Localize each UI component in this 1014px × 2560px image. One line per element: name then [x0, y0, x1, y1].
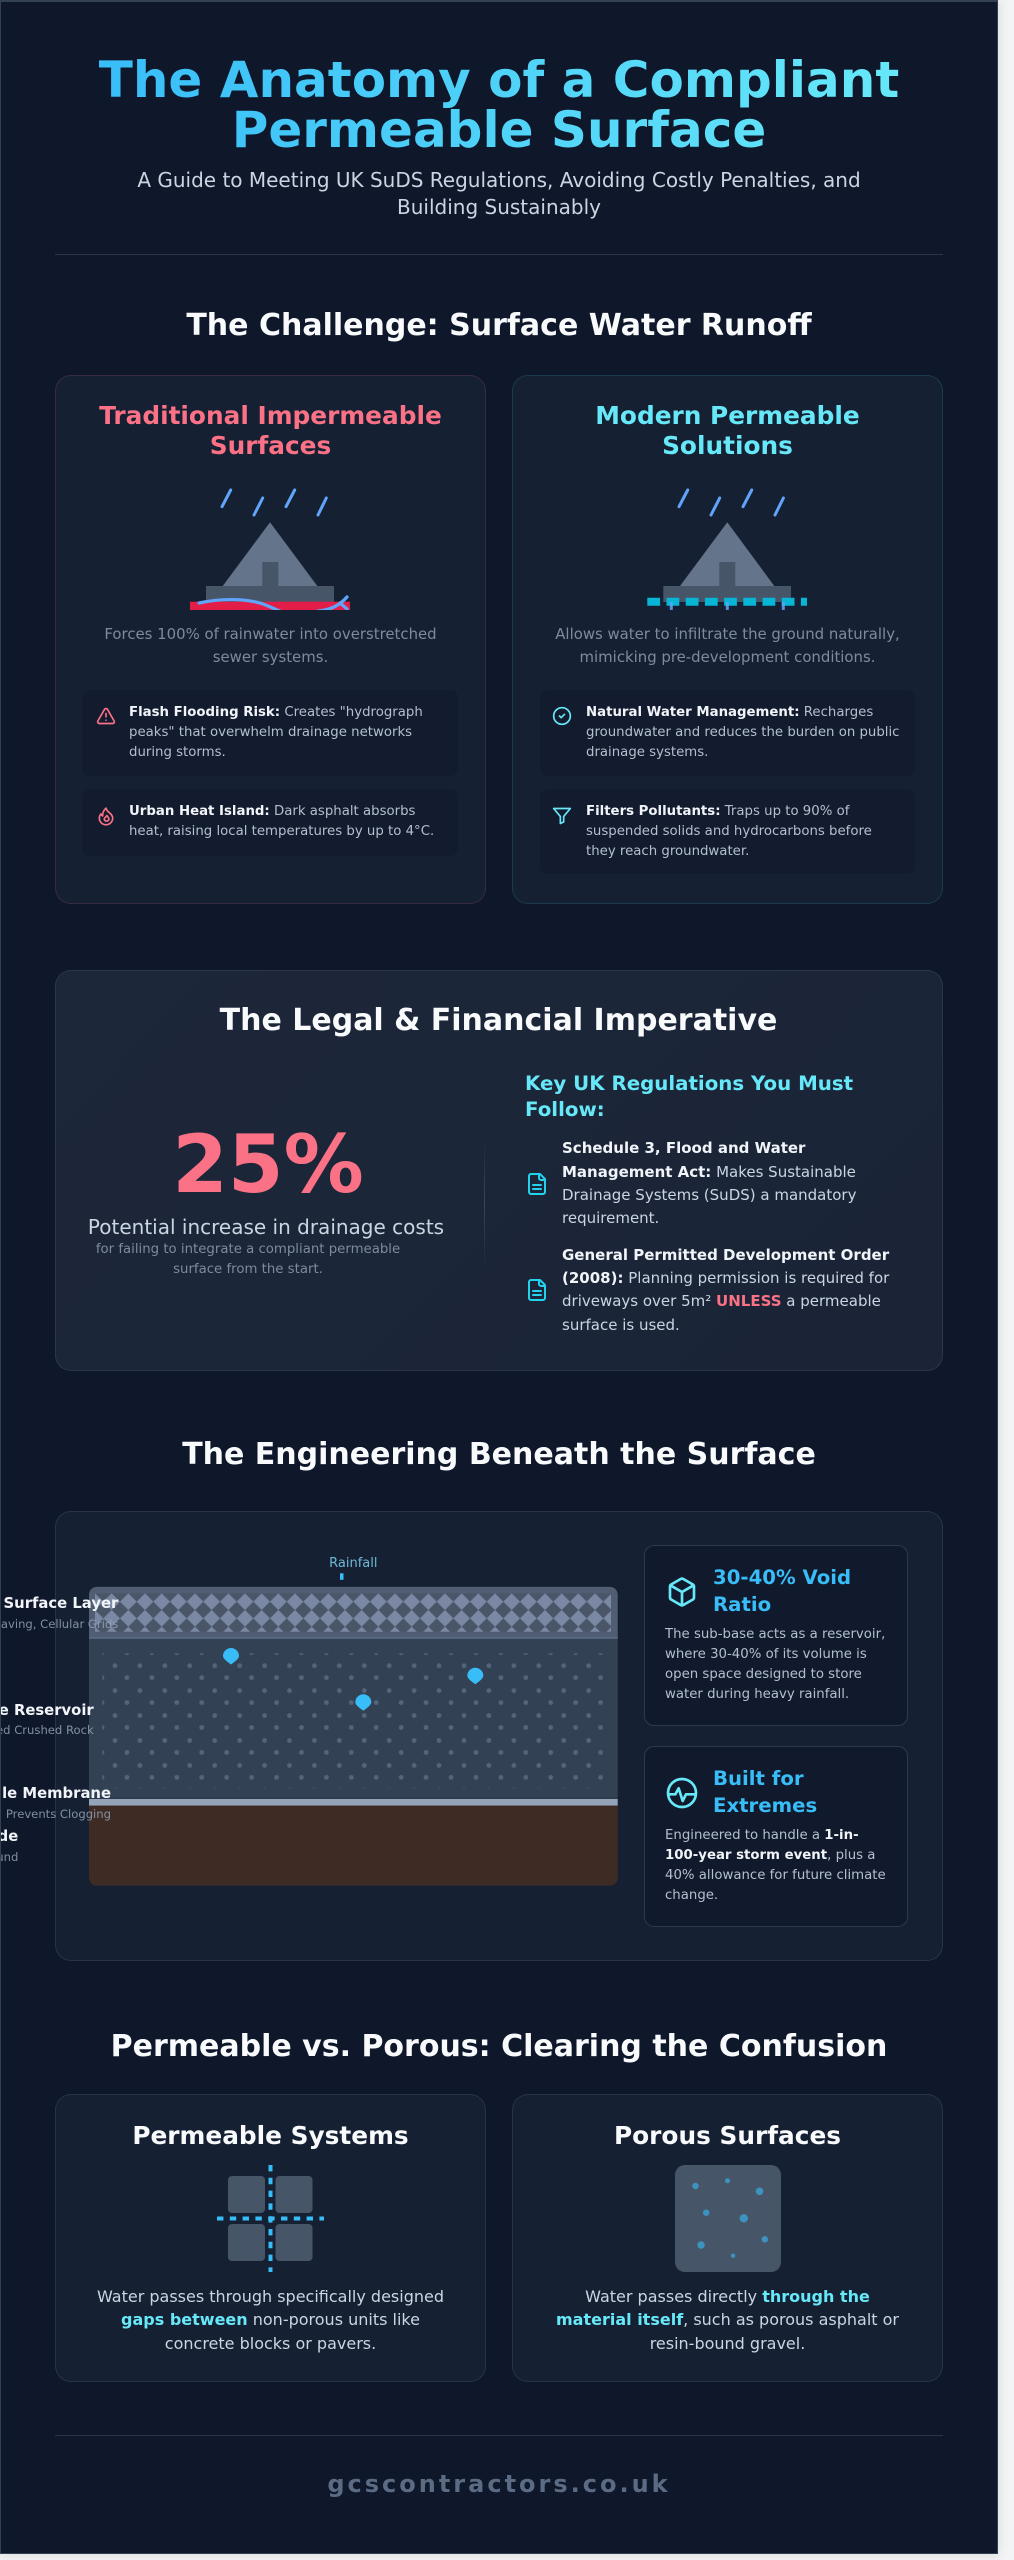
- text: filters pollutants: they reach groundwater.: [586, 844, 749, 859]
- feature heading: void ratio: Ratio: [713, 1593, 771, 1616]
- icon: document 1: [528, 1173, 546, 1195]
- feature heading: void ratio: 30-40% Void: [713, 1566, 851, 1589]
- layer: subgrade: [89, 1806, 618, 1886]
- panel heading: porous surfaces: Porous Surfaces: [614, 2121, 841, 2150]
- icon: document 2: [528, 1279, 546, 1301]
- text: porous surfaces: Water passes directly through the: [585, 2287, 870, 2306]
- illustration: house on permeable surface: [647, 488, 807, 610]
- text: flash flooding: during storms.: [129, 745, 226, 760]
- layer: surface: [89, 1587, 618, 1639]
- panel heading: permeable systems: Permeable Systems: [132, 2121, 409, 2150]
- feature heading: extremes: [713, 1767, 817, 1817]
- title: Permeable Surface: [232, 101, 766, 159]
- text: flash flooding: [129, 705, 423, 760]
- text: permeable systems: [97, 2287, 444, 2353]
- layer: reservoir: [89, 1639, 618, 1799]
- text: urban heat island: [129, 804, 434, 839]
- panel heading: modern: Solutions: [662, 431, 793, 460]
- heading: key regulations: Follow:: [525, 1098, 605, 1121]
- subtitle: Building Sustainably: [397, 195, 601, 219]
- text: natural water management: Natural Water Management: Recharges: [586, 705, 873, 720]
- heading: the engineering: The Engineering Beneath the Surface: [182, 1437, 816, 1472]
- water drops: [223, 1648, 483, 1711]
- text: natural water management: [586, 705, 900, 760]
- label: rainfall: Rainfall: [329, 1556, 377, 1571]
- icon: porous block: [675, 2165, 781, 2272]
- regulation: schedule 3: requirement.: [562, 1209, 659, 1227]
- feature text: void ratio: where 30-40% of its volume is: [665, 1647, 867, 1662]
- chart: permeable paving cross section: [89, 1556, 618, 1886]
- panel: engineering cross section: [55, 1511, 943, 1961]
- icon: pavers with gaps: [217, 2165, 324, 2272]
- panel: permeable systems: [55, 2094, 486, 2382]
- panel heading: traditional: [99, 401, 442, 460]
- regulation: permitted development order: driveways over 5m² UNLESS a permeable: [562, 1292, 881, 1310]
- description: traditional: Forces 100% of rainwater into overstretched: [104, 625, 437, 643]
- callout: flash flooding: [82, 690, 458, 776]
- regulation: schedule 3: Drainage Systems (SuDS) a mandatory: [562, 1186, 856, 1204]
- heading: the challenge: The Challenge: Surface Water Runoff: [186, 308, 812, 343]
- feature text: void ratio: [664, 1627, 885, 1702]
- footer: website: gcscontractors.co.uk: [327, 2470, 671, 2498]
- panel: legal and financial imperative: [55, 970, 943, 1371]
- text: flash flooding: peaks" that overwhelm drainage networks: [129, 725, 412, 740]
- regulation: permitted development order: General Permitted Development Order: [562, 1246, 889, 1264]
- feature heading: extremes: Built for: [713, 1767, 804, 1790]
- statistic: 25%: 25%: [172, 1118, 364, 1211]
- panel heading: traditional: Traditional Impermeable: [99, 401, 442, 430]
- statistic note: [96, 1242, 400, 1277]
- heading: key regulations: Key UK Regulations You Must: [525, 1072, 853, 1095]
- icon: flame: [98, 807, 114, 826]
- heading: permeable vs porous: Permeable vs. Porous: Clearing the Confusion: [111, 2029, 887, 2064]
- panel heading: modern: Modern Permeable: [595, 401, 860, 430]
- statistic note: surface from the start.: [173, 1262, 323, 1277]
- text: filters pollutants: [586, 804, 872, 859]
- description: traditional: sewer systems.: [213, 648, 328, 666]
- panel: porous surfaces: [512, 2094, 943, 2382]
- feature heading: extremes: Extremes: [713, 1794, 817, 1817]
- regulation: schedule 3: Management Act: Makes Sustainable: [562, 1163, 856, 1181]
- heading: legal: The Legal & Financial Imperative: [220, 1003, 777, 1038]
- callout: natural water management: [540, 690, 915, 776]
- text: filters pollutants: suspended solids and hydrocarbons before: [586, 824, 872, 839]
- feature: built for extremes: [644, 1746, 908, 1927]
- callout: urban heat island: [82, 789, 458, 856]
- feature text: extremes: 100-year storm event, plus a: [665, 1848, 875, 1863]
- feature text: void ratio: The sub-base acts as a reservoir,: [665, 1627, 885, 1642]
- feature text: extremes: change.: [665, 1888, 718, 1903]
- statistic label: Potential increase in drainage costs: [88, 1215, 444, 1239]
- regulation: permitted development order: surface is used.: [562, 1316, 680, 1334]
- panel: modern permeable solutions: [512, 375, 943, 904]
- description: modern: mimicking pre-development conditions.: [580, 648, 875, 666]
- text: urban heat island: Urban Heat Island: Dark asphalt absorbs: [129, 804, 415, 819]
- text: permeable systems: gaps between non-porous units like: [121, 2310, 420, 2329]
- text: natural water management: drainage systems.: [586, 745, 708, 760]
- icon: filter: [552, 808, 572, 824]
- feature text: void ratio: open space designed to store: [665, 1667, 862, 1682]
- feature: void ratio: [644, 1545, 908, 1726]
- text: porous surfaces: material itself, such as porous asphalt or: [556, 2310, 899, 2329]
- illustration: house on impermeable surface: [190, 488, 350, 610]
- callout: filters pollutants: [540, 789, 915, 874]
- description: modern: Allows water to infiltrate the ground naturally,: [555, 625, 900, 643]
- panel heading: modern: [595, 401, 860, 460]
- title: The Anatomy of a Compliant: [99, 51, 899, 109]
- feature text: extremes: Engineered to handle a 1-in-: [665, 1828, 859, 1843]
- text: permeable systems: concrete blocks or pavers.: [165, 2334, 376, 2353]
- layer: membrane: [89, 1799, 618, 1806]
- feature text: void ratio: water during heavy rainfall.: [665, 1687, 849, 1702]
- regulation: schedule 3: Schedule 3, Flood and Water: [562, 1139, 805, 1157]
- text: natural water management: groundwater and reduces the burden on public: [586, 725, 900, 740]
- regulation: permitted development order: [562, 1246, 890, 1334]
- subtitle: A Guide to Meeting UK SuDS Regulations, Avoiding Costly Penalties, and: [137, 168, 861, 192]
- text: urban heat island: heat, raising local temperatures by up to 4°C.: [129, 824, 434, 839]
- panel heading: traditional: Surfaces: [210, 431, 331, 460]
- feature heading: void ratio: [713, 1566, 851, 1616]
- feature text: extremes: [665, 1828, 886, 1903]
- icon: check circle: [552, 706, 572, 726]
- text: filters pollutants: Filters Pollutants: Traps up to 90% of: [586, 804, 849, 819]
- title: [99, 51, 899, 159]
- icon: cube: [668, 1577, 696, 1607]
- icon: activity circle: [666, 1778, 698, 1808]
- regulation: schedule 3: [562, 1139, 856, 1227]
- text: porous surfaces: resin-bound gravel.: [650, 2334, 805, 2353]
- heading: key regulations: [525, 1072, 853, 1121]
- arrow: rainfall tick: [340, 1573, 344, 1580]
- description: modern: [555, 625, 900, 666]
- icon: warning triangle: [96, 708, 116, 724]
- statistic note: for failing to integrate a compliant permeable: [96, 1242, 400, 1257]
- description: traditional: [104, 625, 437, 666]
- text: permeable systems: Water passes through specifically designed: [97, 2287, 444, 2306]
- text: flash flooding: Flash Flooding Risk: Creates "hydrograph: [129, 705, 423, 720]
- regulation: permitted development order: (2008): Planning permission is required for: [562, 1269, 889, 1287]
- text: porous surfaces: [556, 2287, 899, 2353]
- feature text: extremes: 40% allowance for future climate: [665, 1868, 886, 1883]
- subtitle: [137, 168, 861, 219]
- panel: traditional impermeable surfaces: [55, 375, 486, 904]
